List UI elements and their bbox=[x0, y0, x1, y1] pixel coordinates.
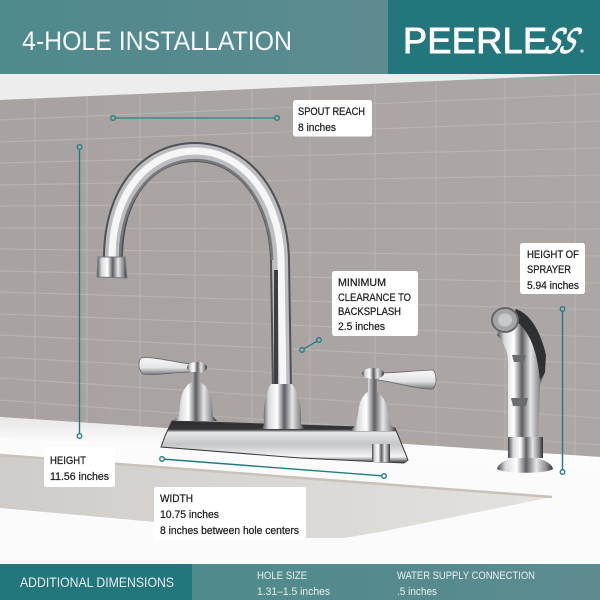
callout: height: 11.56 inches bbox=[50, 471, 109, 483]
wall tiles bbox=[0, 74, 600, 464]
sprayer bbox=[492, 308, 553, 473]
callout: minimum clearance bbox=[300, 271, 418, 352]
countertop and sink bbox=[0, 417, 600, 564]
callout: width: WIDTH bbox=[160, 493, 193, 505]
spout bbox=[112, 151, 283, 390]
callout: minimum clearance: MINIMUM bbox=[338, 277, 386, 289]
callout: minimum clearance: BACKSPLASH bbox=[338, 306, 401, 318]
water supply connection bbox=[397, 570, 535, 598]
callout: width bbox=[154, 457, 386, 540]
footer panel: additional dimensions bbox=[0, 564, 192, 600]
callout: height: HEIGHT bbox=[50, 455, 86, 467]
white soffit band bbox=[0, 74, 600, 100]
faucet bbox=[97, 151, 436, 463]
callout: height bbox=[44, 145, 115, 487]
logo: Peerless: PEERLE bbox=[403, 20, 547, 61]
callout: spout reach: SPOUT REACH bbox=[298, 106, 365, 118]
callout: minimum clearance: CLEARANCE TO bbox=[338, 292, 411, 304]
callout: minimum clearance: 2.5 inches bbox=[338, 321, 385, 333]
footer heading: ADDITIONAL DIMENSIONS bbox=[20, 574, 174, 590]
center hub bbox=[262, 384, 305, 429]
header panel: logo bbox=[388, 0, 600, 74]
callout: height of sprayer bbox=[520, 243, 585, 474]
callout: height of sprayer: 5.94 inches bbox=[527, 280, 579, 292]
callout: width: 10.75 inches bbox=[160, 509, 219, 521]
title: 4-HOLE INSTALLATION bbox=[22, 26, 292, 56]
callout: spout reach bbox=[111, 100, 372, 136]
callout: width: 8 inches between hole centers bbox=[160, 525, 299, 537]
header panel: title bbox=[0, 0, 388, 74]
water supply connection: .5 inches bbox=[397, 586, 437, 598]
deck corner hardware bbox=[372, 444, 390, 462]
callout: height of sprayer: HEIGHT OF bbox=[527, 249, 579, 261]
left handle bbox=[139, 358, 217, 421]
callout: spout reach: 8 inches bbox=[298, 122, 336, 134]
hole size: 1.31–1.5 inches bbox=[257, 586, 330, 598]
callout: height of sprayer: SPRAYER bbox=[527, 264, 571, 276]
right handle bbox=[350, 368, 436, 431]
deck plate bbox=[161, 421, 408, 463]
aerator bbox=[97, 257, 127, 278]
water supply connection: WATER SUPPLY CONNECTION bbox=[397, 570, 535, 582]
footer panel: values bbox=[192, 564, 600, 600]
hole size bbox=[257, 570, 330, 598]
hole size: HOLE SIZE bbox=[257, 570, 307, 582]
